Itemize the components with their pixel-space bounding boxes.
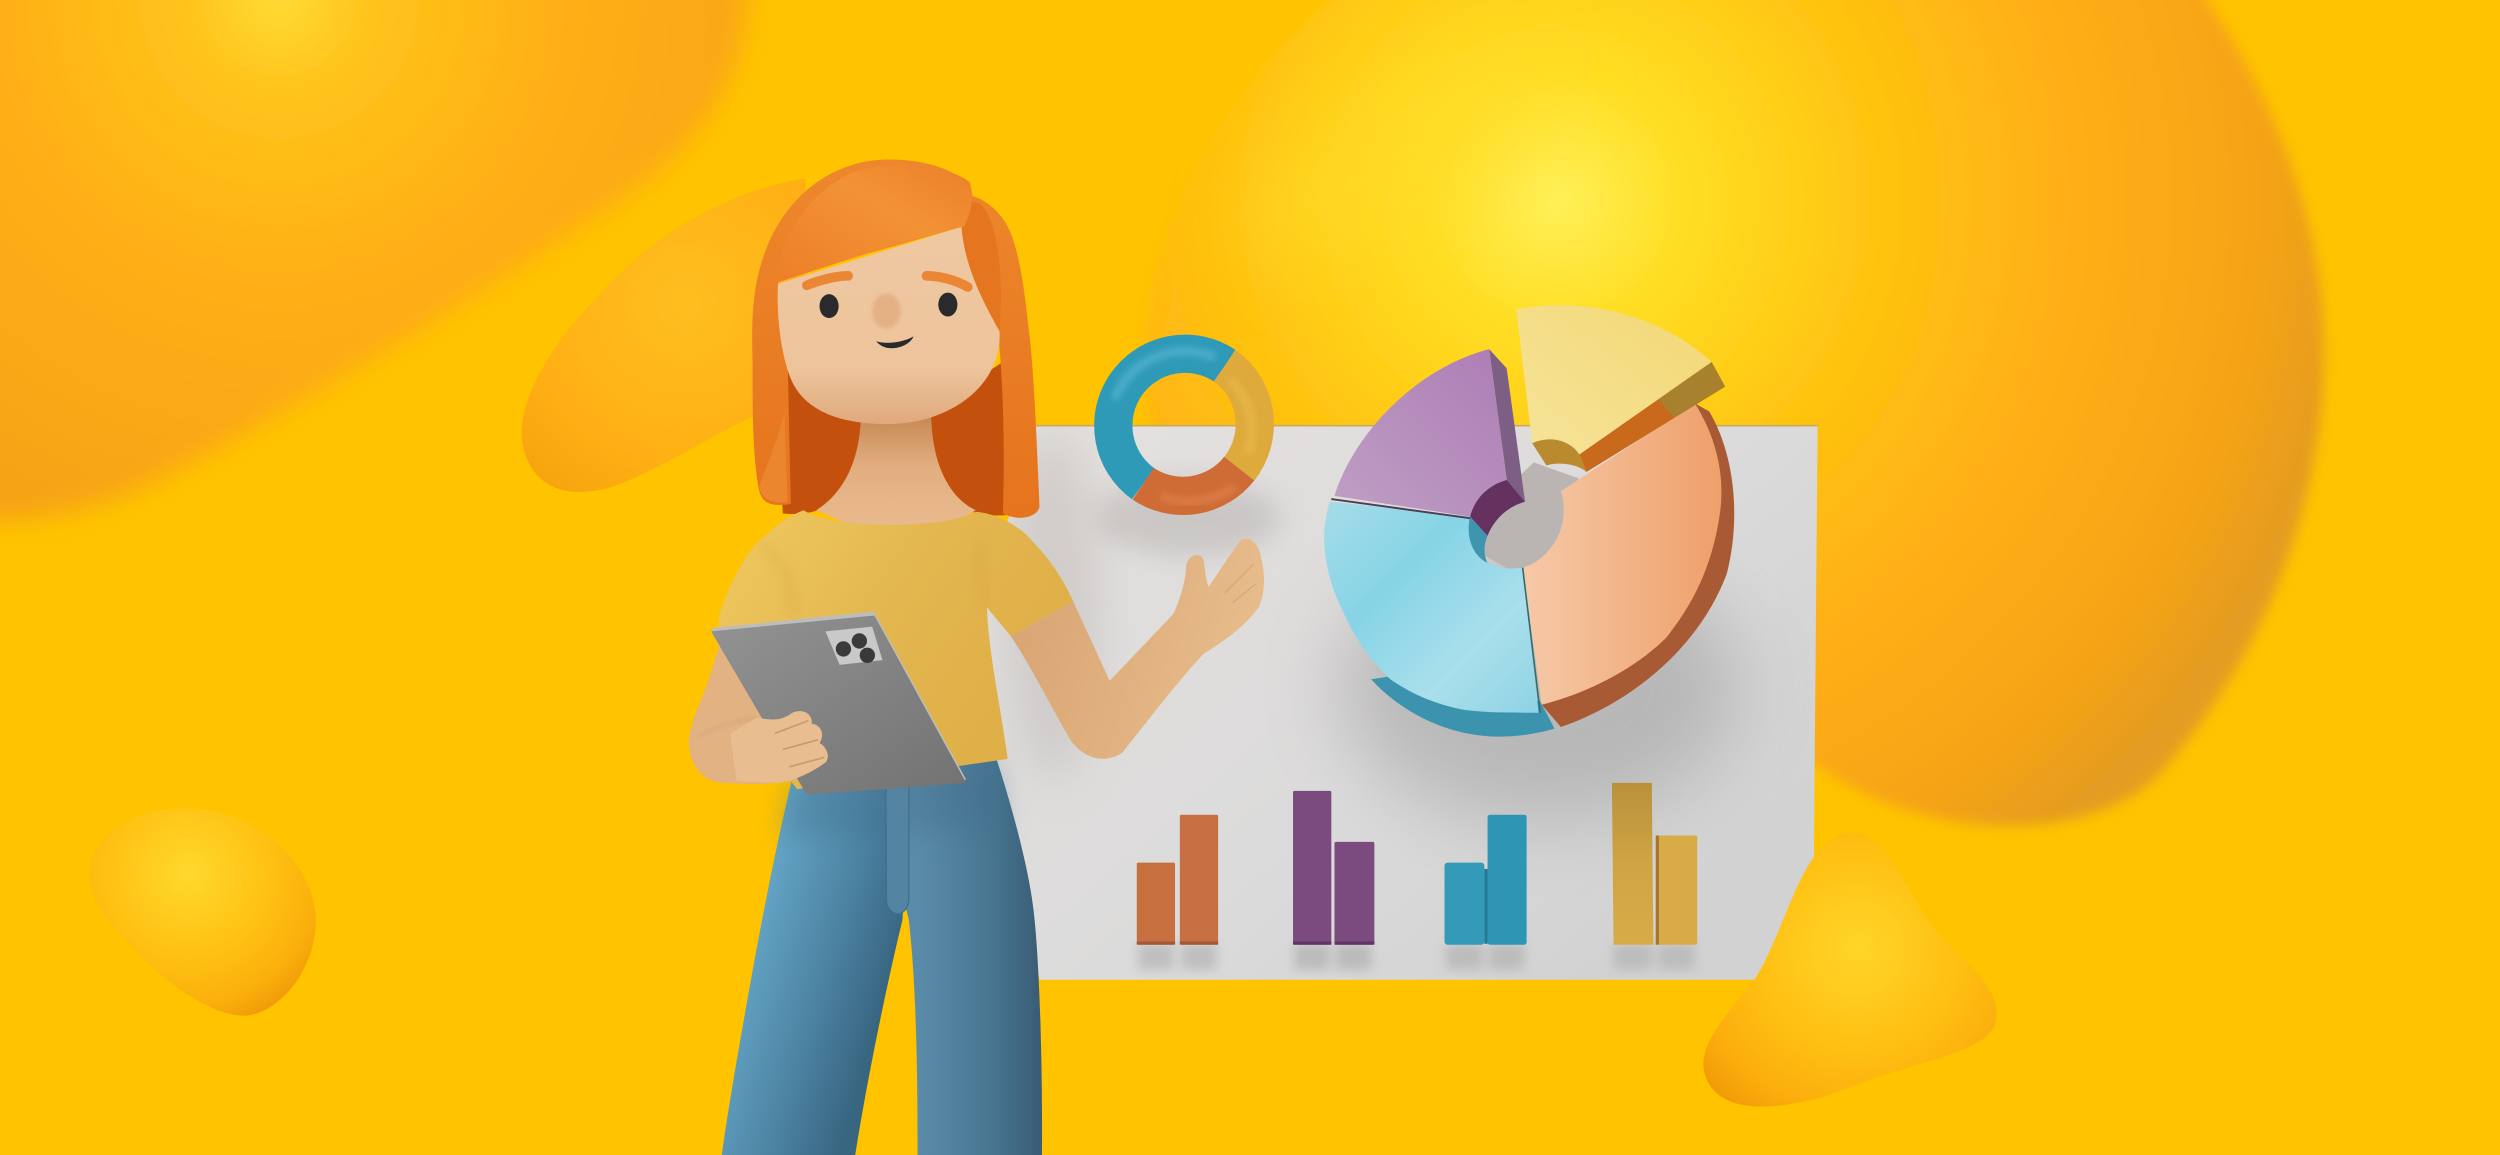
nose [872,293,901,328]
face [778,202,1001,424]
pie: purple inner wall [1470,480,1525,536]
pie: orange side wall [1542,403,1734,727]
bar chart [1137,783,1697,969]
pie: yellow side wall [1579,362,1725,472]
tablet [711,611,966,795]
board shadows [1004,430,1738,821]
neck [816,411,976,550]
orange bars [1137,815,1218,969]
pie: blue side wall [1371,670,1555,737]
right eyebrow [926,276,968,287]
board panel [973,426,1818,980]
fingers on tablet [730,711,828,783]
pie: orange segment [1523,403,1721,705]
donut chart [1113,351,1255,501]
jeans [722,759,1042,1155]
blurred blob: top left [0,0,747,520]
fringe [778,165,972,282]
donut: blue segment [1113,354,1225,484]
left eyebrow [807,276,848,285]
lower arm and holding hand [689,641,805,784]
pie: purple segment [1335,349,1507,517]
left leg [722,765,912,1155]
pie: blue segment [1324,502,1539,713]
waist shading [781,759,1008,837]
left eye [820,294,839,318]
highlight on large blob [1219,9,1587,294]
blurred blob: large right [1143,0,2324,826]
blob behind hair [522,179,805,492]
teal bars [1445,815,1527,969]
small blob: left [89,808,316,1016]
purple bars [1293,791,1374,969]
fly placket [886,781,909,914]
yellow t-shirt [717,510,1073,789]
smile [876,336,914,348]
inner right strand [961,202,1001,332]
character: woman [689,159,1264,1155]
hair silhouette with side strands [752,159,1040,518]
pie: purple side wall [1489,349,1525,502]
presentation board [973,305,1818,980]
donut: yellow segment [1225,366,1255,469]
raised arm and open hand [1011,539,1264,759]
back hair [773,359,1008,516]
small blob: bottom right [1703,832,1997,1107]
right eye [938,293,957,316]
right leg [902,759,1042,1155]
donut: orange segment [1143,469,1239,496]
pie: blue inner wall [1469,517,1488,563]
pie: yellow segment [1516,305,1712,454]
pie chart [1324,305,1734,737]
tablet camera module [825,627,882,665]
pie: centre hole shadow [1475,462,1578,577]
gold bars [1612,783,1697,969]
